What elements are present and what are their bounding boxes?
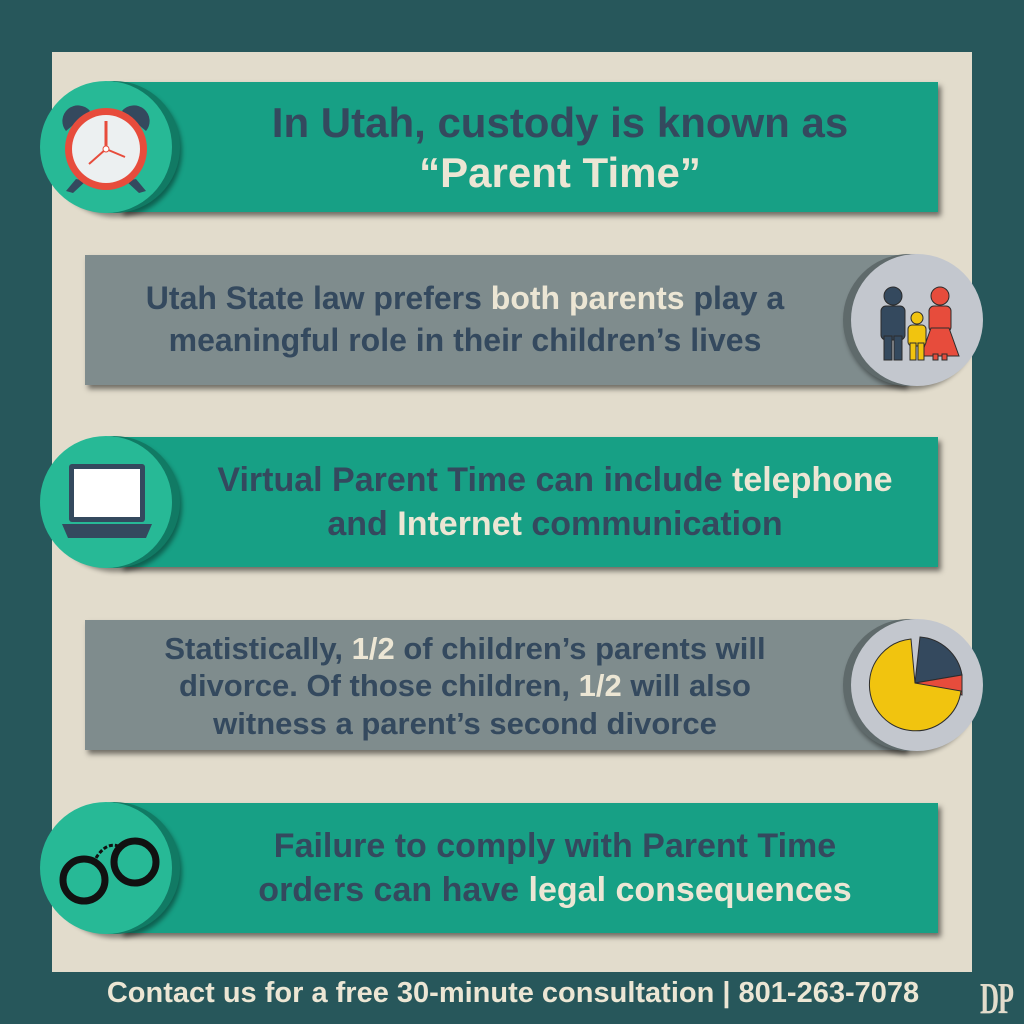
text 3	[217, 461, 893, 543]
text 4	[164, 631, 766, 741]
banner 2: both parents	[84, 254, 983, 394]
text 5: Failure to comply with Parent Time	[274, 827, 836, 865]
text 2	[146, 280, 784, 358]
text 5	[258, 827, 852, 909]
text 4: divorce. Of those children, 1/2 will also	[179, 668, 751, 703]
text 3: Virtual Parent Time can include telephone	[217, 461, 893, 499]
banner 3: virtual	[40, 436, 944, 576]
text 2: Utah State law prefers both parents play a	[146, 280, 784, 316]
text 3: and Internet communication	[327, 505, 783, 543]
heading 1: In Utah, custody is known as	[272, 99, 848, 146]
icon: pie chart	[851, 619, 983, 751]
text 4: witness a parent’s second divorce	[213, 706, 717, 741]
banner 1: parent time	[40, 81, 944, 220]
text 2: meaningful role in their children’s lives	[169, 322, 761, 358]
text 4: Statistically, 1/2 of children’s parents will	[164, 631, 766, 666]
banner 5: consequences	[40, 802, 944, 942]
footer contact: Contact us for a free 30-minute consultation | 801-263-7078	[107, 977, 919, 1009]
icon: alarm clock	[40, 81, 172, 213]
icon: family	[851, 254, 983, 386]
banner 4: statistics	[84, 619, 983, 758]
heading 1: “Parent Time”	[419, 149, 701, 196]
text 5: orders can have legal consequences	[258, 871, 852, 909]
icon: handcuffs	[40, 802, 172, 934]
logo DP: DP	[980, 974, 1013, 1023]
icon: laptop	[40, 436, 172, 568]
heading 1	[272, 99, 848, 196]
